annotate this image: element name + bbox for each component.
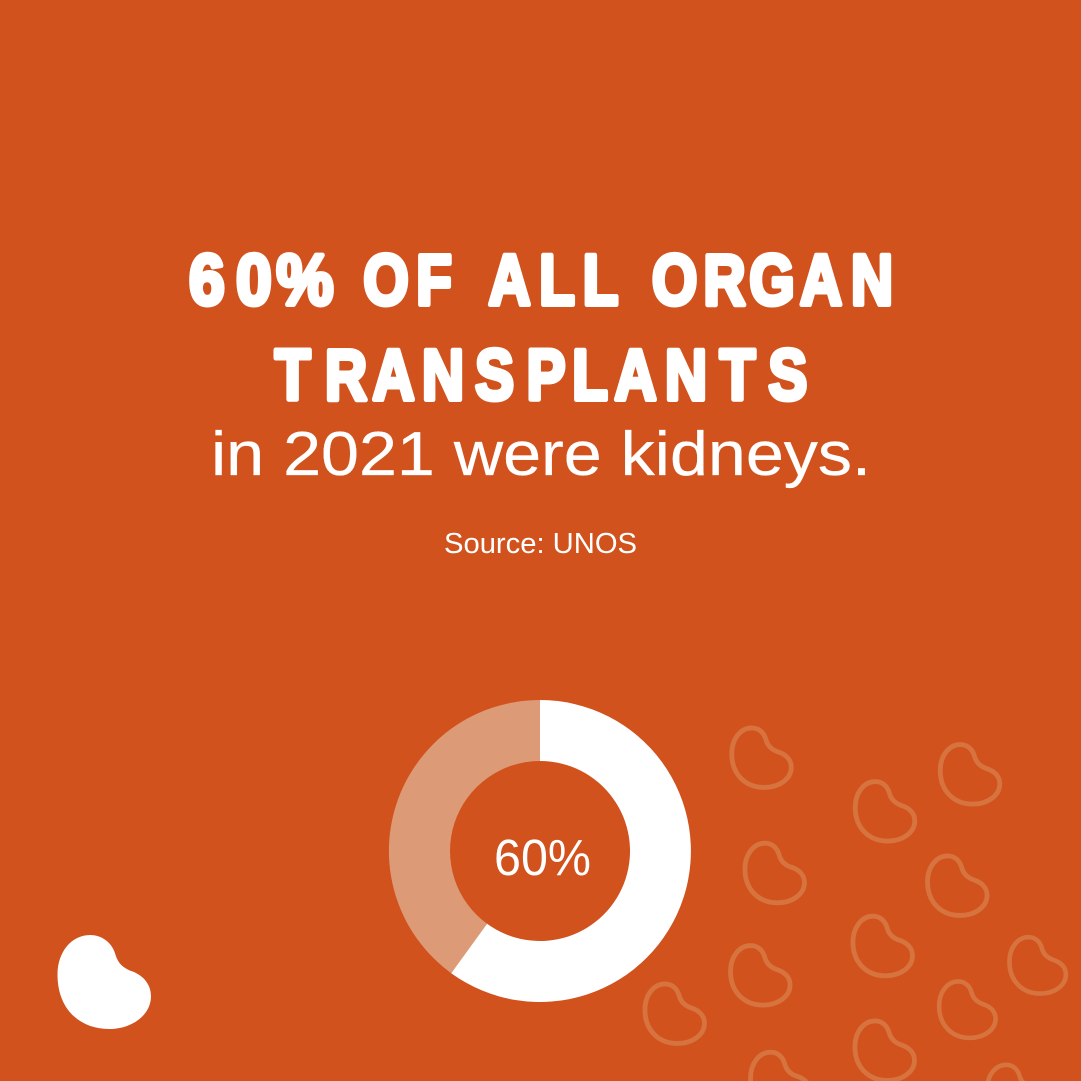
subtitle: in 2021 were kidneys. <box>211 420 871 489</box>
title: OF ALL ORGAN <box>363 240 893 320</box>
donut segment: kidneys 60% <box>451 700 691 1002</box>
source note: Source: UNOS <box>444 528 637 560</box>
donut segment: remaining 40% <box>389 700 540 973</box>
icon: solid kidney bean <box>58 935 151 1029</box>
title: 60% <box>189 241 333 320</box>
donut label: 60% <box>494 829 591 886</box>
pattern: kidney bean outlines <box>645 728 1066 1081</box>
donut chart <box>389 700 691 1002</box>
title <box>189 240 893 415</box>
title: TRANSPLANTS <box>275 335 807 415</box>
